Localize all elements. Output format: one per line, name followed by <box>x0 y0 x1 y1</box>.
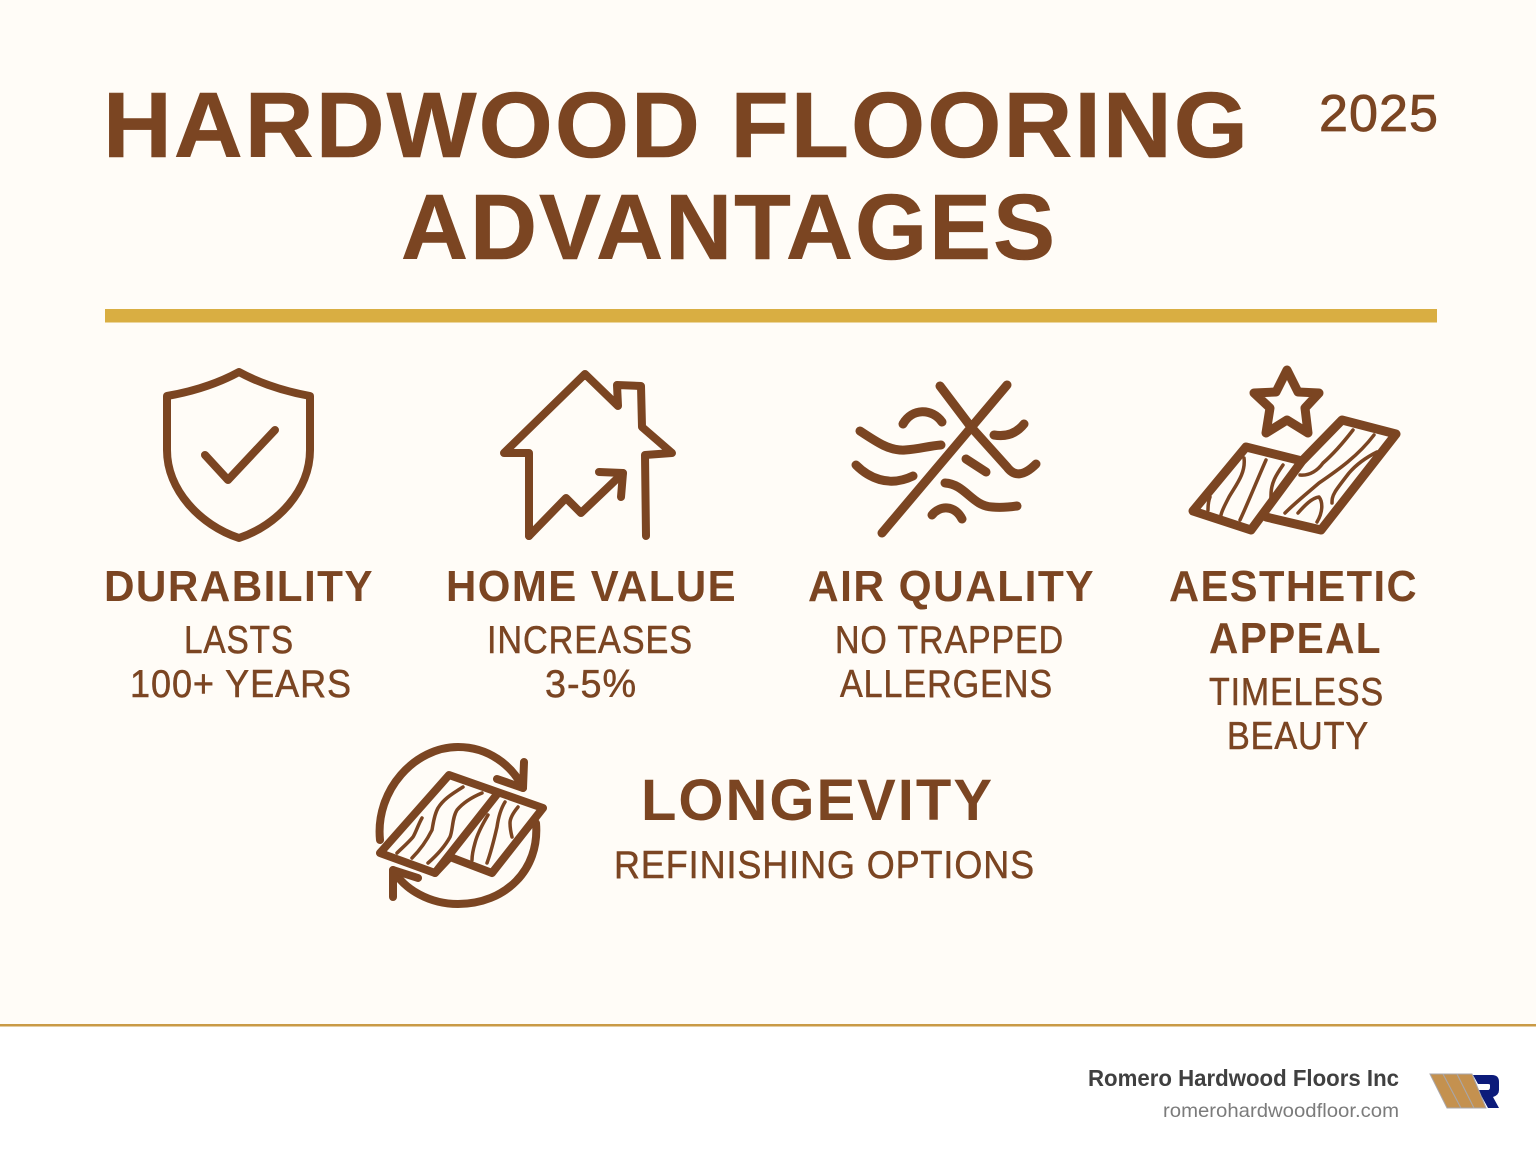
text: timeless beauty: BEAUTY <box>1227 715 1369 758</box>
heading: aesthetic appeal: APPEAL <box>1209 614 1382 663</box>
text: increases 3-5%: 3-5% <box>545 663 637 706</box>
text: lasts 100+ years <box>130 619 352 706</box>
panel: home value <box>446 374 737 706</box>
text: no trapped allergens: NO TRAPPED <box>835 619 1064 662</box>
panel: durability <box>104 372 374 706</box>
heading: durability: DURABILITY <box>104 562 374 611</box>
title: ADVANTAGES <box>401 175 1057 279</box>
heading: air quality: AIR QUALITY <box>808 562 1095 611</box>
heading: longevity: LONGEVITY <box>641 768 994 833</box>
text: refinishing options: REFINISHING OPTIONS <box>614 844 1035 887</box>
footer: company name and url <box>1088 1065 1399 1122</box>
panel: aesthetic appeal <box>1169 370 1418 758</box>
footer: company name and url: Romero Hardwood Floors Inc <box>1088 1065 1399 1091</box>
text: timeless beauty <box>1209 671 1384 758</box>
icon: shield with check <box>167 372 310 538</box>
icon: house with rising arrow <box>504 374 672 536</box>
title: HARDWOOD FLOORING <box>103 73 1250 177</box>
text: no trapped allergens: ALLERGENS <box>840 663 1053 706</box>
heading: aesthetic appeal: AESTHETIC <box>1169 562 1418 611</box>
year label: 2025 <box>1319 85 1439 143</box>
heading: home value: HOME VALUE <box>446 562 737 611</box>
heading: aesthetic appeal <box>1169 562 1418 663</box>
text: no trapped allergens <box>835 619 1064 706</box>
text: increases 3-5% <box>487 619 693 706</box>
panel: longevity <box>380 747 1035 904</box>
footer: company name and url: romerohardwoodfloor.com <box>1163 1100 1399 1122</box>
text: lasts 100+ years: 100+ YEARS <box>130 663 352 706</box>
text: lasts 100+ years: LASTS <box>184 619 294 662</box>
gold header rule <box>105 309 1437 322</box>
title <box>103 73 1250 279</box>
logo: romero planks and R <box>1430 1074 1499 1108</box>
icon: star over wood planks <box>1193 370 1396 530</box>
text: increases 3-5%: INCREASES <box>487 619 693 662</box>
panel: air quality <box>808 385 1095 706</box>
icon: planks in refresh arrows <box>380 747 543 904</box>
icon: crossed out air currents <box>856 385 1036 533</box>
text: timeless beauty: TIMELESS <box>1209 671 1384 714</box>
